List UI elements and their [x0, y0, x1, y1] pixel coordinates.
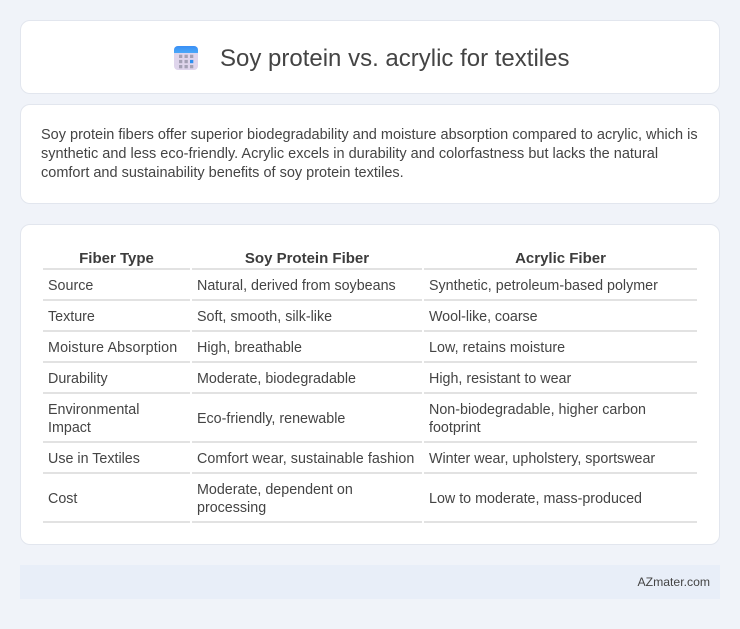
row: cost: Moderate, dependent on — [197, 482, 353, 498]
row: source: Source — [48, 278, 93, 294]
row: texture: Soft, smooth, silk-like — [197, 309, 332, 325]
footer bar — [20, 565, 720, 599]
summary text — [41, 127, 698, 181]
row: moisture: Moisture Absorption — [48, 340, 177, 356]
row: source — [48, 278, 658, 294]
title: Soy protein vs. acrylic for textiles — [220, 45, 569, 72]
row: environmental impact: Impact — [48, 420, 91, 436]
row: cost — [48, 482, 642, 516]
panel: summary card — [20, 104, 720, 204]
row: use in textiles: Winter wear, upholstery, sportswear — [429, 451, 655, 467]
summary text: comfort and sustainability benefits of soy protein textiles. — [41, 165, 404, 181]
row: environmental impact: Environmental — [48, 402, 139, 418]
row: source: Natural, derived from soybeans — [197, 278, 396, 294]
row: texture — [48, 309, 538, 325]
row: durability: High, resistant to wear — [429, 371, 571, 387]
table header: Acrylic Fiber — [515, 250, 606, 267]
row: environmental impact: Non-biodegradable, higher carbon — [429, 402, 646, 418]
row: environmental impact — [48, 402, 646, 436]
row: use in textiles: Use in Textiles — [48, 451, 140, 467]
summary text: synthetic and less eco-friendly. Acrylic excels in durability and colorfastness but lacks the natural — [41, 146, 658, 162]
table header: Fiber Type — [79, 250, 154, 267]
row: cost: processing — [197, 500, 266, 516]
row: moisture: Low, retains moisture — [429, 340, 565, 356]
panel: title card — [20, 20, 720, 94]
row: durability — [48, 371, 572, 387]
icon: calendar — [174, 46, 198, 70]
footer brand text: AZmater.com — [638, 575, 710, 589]
row: moisture — [48, 340, 565, 356]
panel: comparison table card — [20, 224, 720, 545]
row: source: Synthetic, petroleum-based polymer — [429, 278, 658, 294]
row: environmental impact: Eco-friendly, renewable — [197, 411, 345, 427]
row: texture: Wool-like, coarse — [429, 309, 538, 325]
table header — [79, 250, 606, 267]
row: cost: Cost — [48, 491, 77, 507]
row: durability: Moderate, biodegradable — [197, 371, 356, 387]
row: environmental impact: footprint — [429, 420, 481, 436]
row: moisture: High, breathable — [197, 340, 302, 356]
row: use in textiles — [48, 451, 655, 467]
row: durability: Durability — [48, 371, 108, 387]
row: cost: Low to moderate, mass-produced — [429, 491, 642, 507]
row: use in textiles: Comfort wear, sustainable fashion — [197, 451, 414, 467]
summary text: Soy protein fibers offer superior biodegradability and moisture absorption compared to acrylic, which is — [41, 127, 698, 143]
table header: Soy Protein Fiber — [245, 250, 369, 267]
row: texture: Texture — [48, 309, 95, 325]
